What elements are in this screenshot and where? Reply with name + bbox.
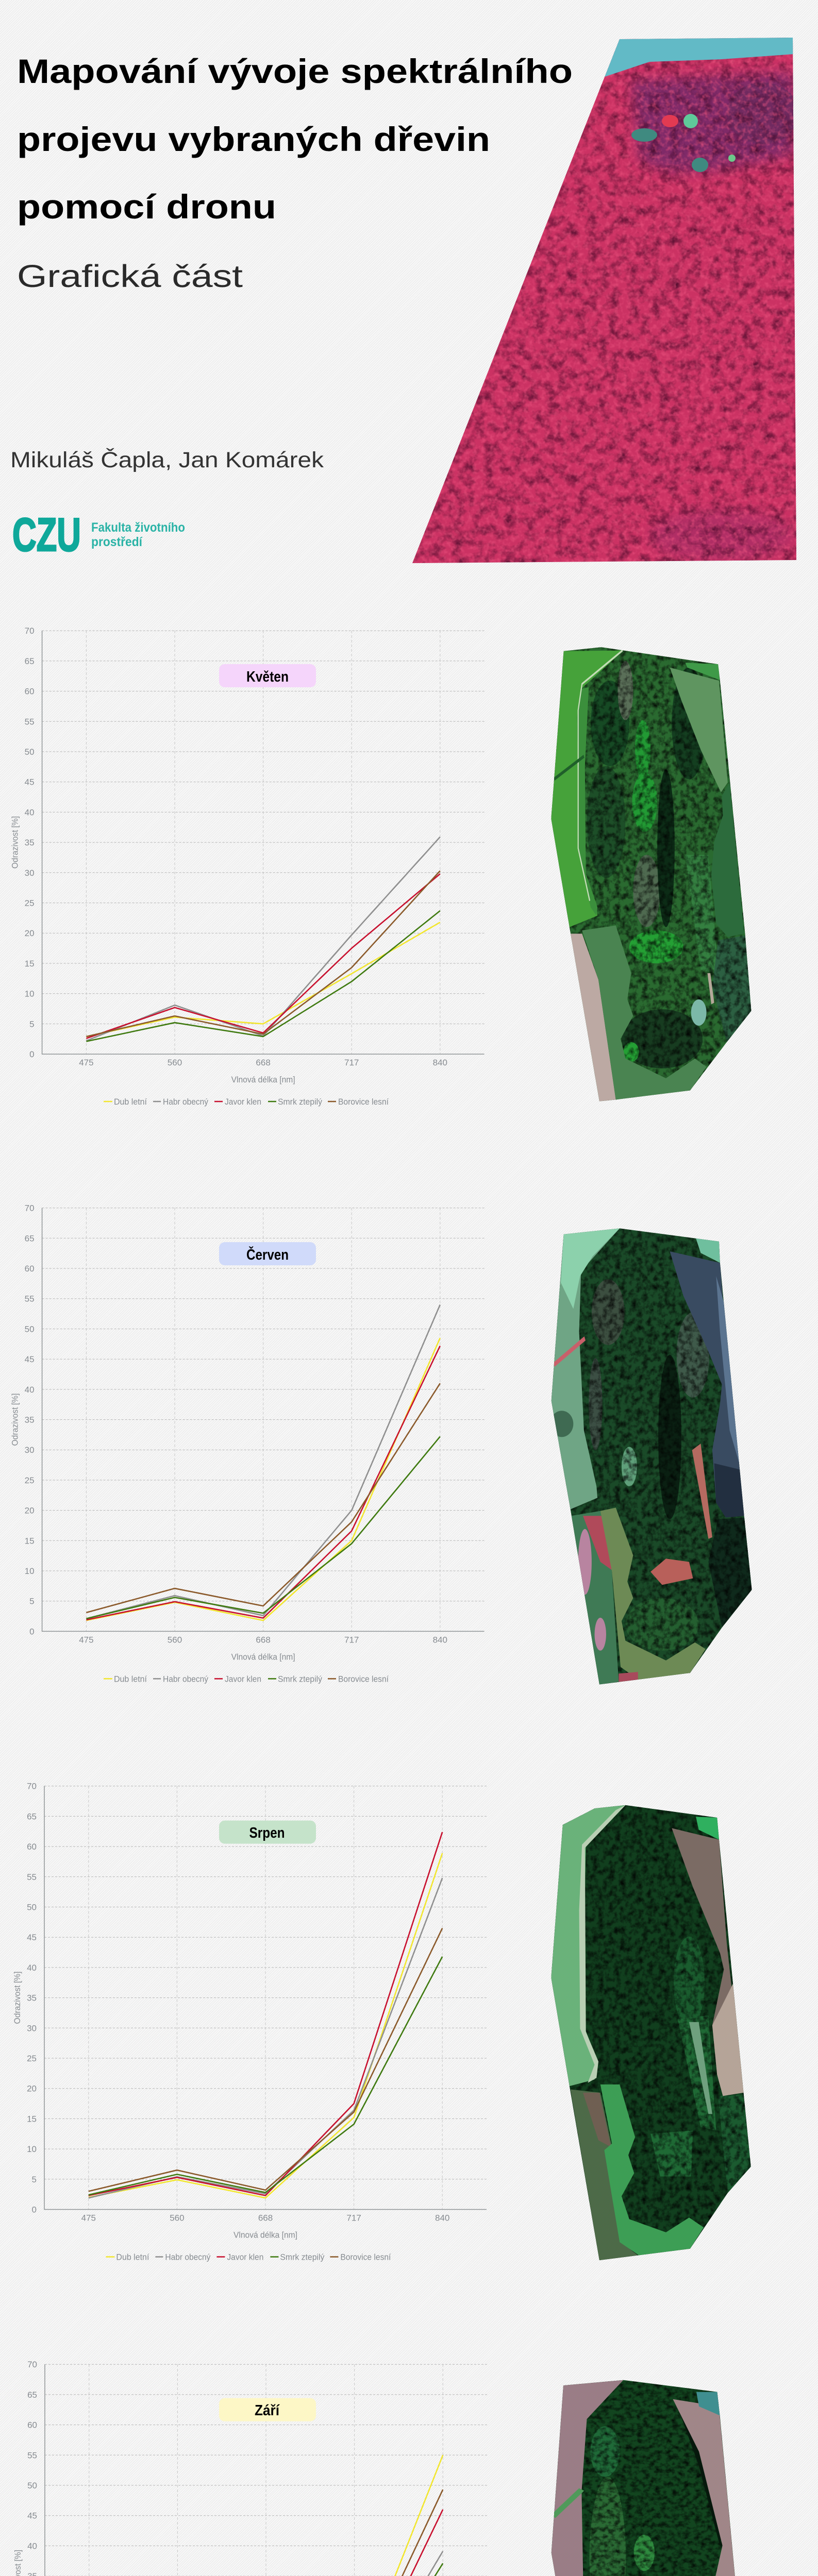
authors: Mikuláš Čapla, Jan Komárek: [10, 448, 324, 472]
chart: Červen: Borovice lesní: [338, 1674, 389, 1684]
chart: Září: 55: [27, 2450, 37, 2460]
month pill: Září: [219, 2398, 316, 2421]
chart: Srpen: Dub letní: [116, 2252, 149, 2262]
chart: Květen: 70: [25, 626, 35, 636]
chart: Červen: Smrk ztepilý: [278, 1674, 322, 1684]
chart: Srpen: 35: [27, 1993, 37, 2003]
month pill: Srpen: Srpen: [249, 1825, 285, 1841]
month pill: Červen: Červen: [246, 1246, 289, 1263]
hero photo: false-colour forest canopy: [407, 36, 799, 567]
chart: Květen: 0: [29, 1049, 35, 1059]
chart: Červen: 65: [25, 1233, 35, 1243]
chart: Červen: Vlnová délka [nm]: [231, 1652, 295, 1662]
chart: Červen: [10, 1204, 485, 1684]
chart: Srpen: 45: [27, 1933, 37, 1942]
chart: Září: [13, 2360, 487, 2576]
chart: Srpen: 0: [32, 2205, 37, 2214]
chart: Srpen: 60: [27, 1842, 37, 1852]
chart: Červen: Odrazivost [%]: [10, 1393, 20, 1446]
chart: Květen: Borovice lesní: [338, 1097, 389, 1107]
chart: Srpen: 50: [27, 1902, 37, 1912]
chart: Srpen: 717: [346, 2213, 361, 2223]
chart: Srpen: 15: [27, 2114, 37, 2124]
chart: Září: 45: [27, 2511, 37, 2521]
chart: Červen: Javor klen: [225, 1674, 261, 1684]
chart: Srpen: Habr obecný: [165, 2252, 211, 2262]
chart: Květen: 20: [25, 928, 35, 938]
chart: Květen: 560: [168, 1058, 182, 1067]
chart: Červen: 840: [433, 1635, 447, 1645]
chart: Květen: 840: [433, 1058, 447, 1067]
chart: Červen: 25: [25, 1476, 35, 1485]
chart: Květen: 717: [344, 1058, 359, 1067]
month pill: Červen: [219, 1242, 316, 1265]
chart: Květen: 30: [25, 868, 35, 878]
title: [17, 52, 573, 226]
subtitle: Grafická část: [17, 259, 243, 294]
chart: Září: 50: [27, 2481, 37, 2490]
chart: Červen: Habr obecný: [163, 1674, 208, 1684]
chart: Červen: 40: [25, 1385, 35, 1395]
chart: Červen: 5: [29, 1597, 35, 1606]
chart: Červen: 45: [25, 1354, 35, 1364]
chart: Červen: 20: [25, 1506, 35, 1516]
chart: Září: 40: [27, 2541, 37, 2551]
drone map: June: [544, 1220, 757, 1690]
logo: faculty: prostředí: [91, 535, 143, 549]
chart: Červen: 60: [25, 1264, 35, 1274]
chart: Květen: Habr obecný: [163, 1097, 208, 1107]
chart: Květen: Smrk ztepilý: [278, 1097, 322, 1107]
chart: Září: 65: [27, 2390, 37, 2400]
month pill: Květen: Květen: [246, 669, 289, 685]
chart: Srpen: 475: [81, 2213, 96, 2223]
chart: Srpen: 5: [32, 2175, 37, 2184]
chart: Srpen: 560: [170, 2213, 185, 2223]
chart: Srpen: Smrk ztepilý: [280, 2252, 325, 2262]
chart: Srpen: 25: [27, 2054, 37, 2063]
chart: Srpen: Vlnová délka [nm]: [233, 2230, 297, 2240]
chart: Červen: 0: [29, 1626, 35, 1636]
chart: Červen: 50: [25, 1324, 35, 1334]
logo: faculty: [13, 517, 185, 552]
chart: Květen: 65: [25, 656, 35, 666]
chart: Květen: 10: [25, 989, 35, 999]
chart: Srpen: Odrazivost [%]: [12, 1971, 22, 2024]
logo: faculty: ČZU: [12, 509, 81, 561]
title: Mapování vývoje spektrálního: [17, 52, 573, 90]
chart: Květen: 50: [25, 747, 35, 757]
title: projevu vybraných dřevin: [17, 120, 490, 158]
drone map: August: [544, 1792, 757, 2268]
chart: Červen: 560: [168, 1635, 182, 1645]
month pill: Srpen: [219, 1821, 316, 1844]
title: pomocí dronu: [17, 188, 276, 226]
chart: Květen: 35: [25, 838, 35, 848]
chart: Červen: Dub letní: [114, 1674, 147, 1684]
chart: Srpen: 668: [258, 2213, 273, 2223]
chart: Srpen: 840: [435, 2213, 449, 2223]
chart: Červen: 70: [25, 1204, 35, 1213]
chart: Květen: Javor klen: [225, 1097, 261, 1107]
chart: Červen: 15: [25, 1536, 35, 1546]
chart: Květen: 668: [256, 1058, 271, 1067]
chart: Srpen: 65: [27, 1811, 37, 1821]
chart: Srpen: 20: [27, 2084, 37, 2094]
chart: Květen: 55: [25, 717, 35, 726]
chart: Srpen: 70: [27, 1782, 37, 1791]
logo: faculty: Fakulta životního: [91, 520, 185, 535]
chart: Září: 60: [27, 2420, 37, 2430]
chart: Květen: 40: [25, 807, 35, 817]
chart: Květen: [10, 626, 485, 1107]
chart: Květen: 45: [25, 777, 35, 787]
chart: Červen: 55: [25, 1294, 35, 1304]
chart: Srpen: [12, 1782, 487, 2262]
chart: Květen: 475: [79, 1058, 94, 1067]
chart: Květen: Vlnová délka [nm]: [231, 1075, 295, 1084]
chart: Květen: Dub letní: [114, 1097, 147, 1107]
chart: Červen: 35: [25, 1415, 35, 1425]
chart: Květen: 5: [29, 1019, 35, 1029]
chart: Květen: 15: [25, 959, 35, 969]
chart: Červen: 668: [256, 1635, 271, 1645]
chart: Červen: 10: [25, 1566, 35, 1576]
chart: Srpen: 30: [27, 2023, 37, 2033]
chart: Červen: 475: [79, 1635, 94, 1645]
chart: Srpen: 55: [27, 1872, 37, 1882]
chart: Srpen: 10: [27, 2144, 37, 2154]
chart: Srpen: Borovice lesní: [340, 2252, 391, 2262]
chart: Květen: 25: [25, 899, 35, 908]
chart: Červen: 30: [25, 1445, 35, 1455]
month pill: Září: Září: [255, 2402, 280, 2419]
chart: Srpen: 40: [27, 1963, 37, 1973]
chart: Květen: Odrazivost [%]: [10, 816, 20, 869]
chart: Červen: 717: [344, 1635, 359, 1645]
chart: Září: 70: [27, 2360, 37, 2369]
chart: Květen: 60: [25, 687, 35, 697]
drone map: September: [552, 2380, 735, 2576]
month pill: Květen: [219, 664, 316, 687]
chart: Srpen: Javor klen: [227, 2252, 263, 2262]
drone map: May: [544, 638, 757, 1108]
